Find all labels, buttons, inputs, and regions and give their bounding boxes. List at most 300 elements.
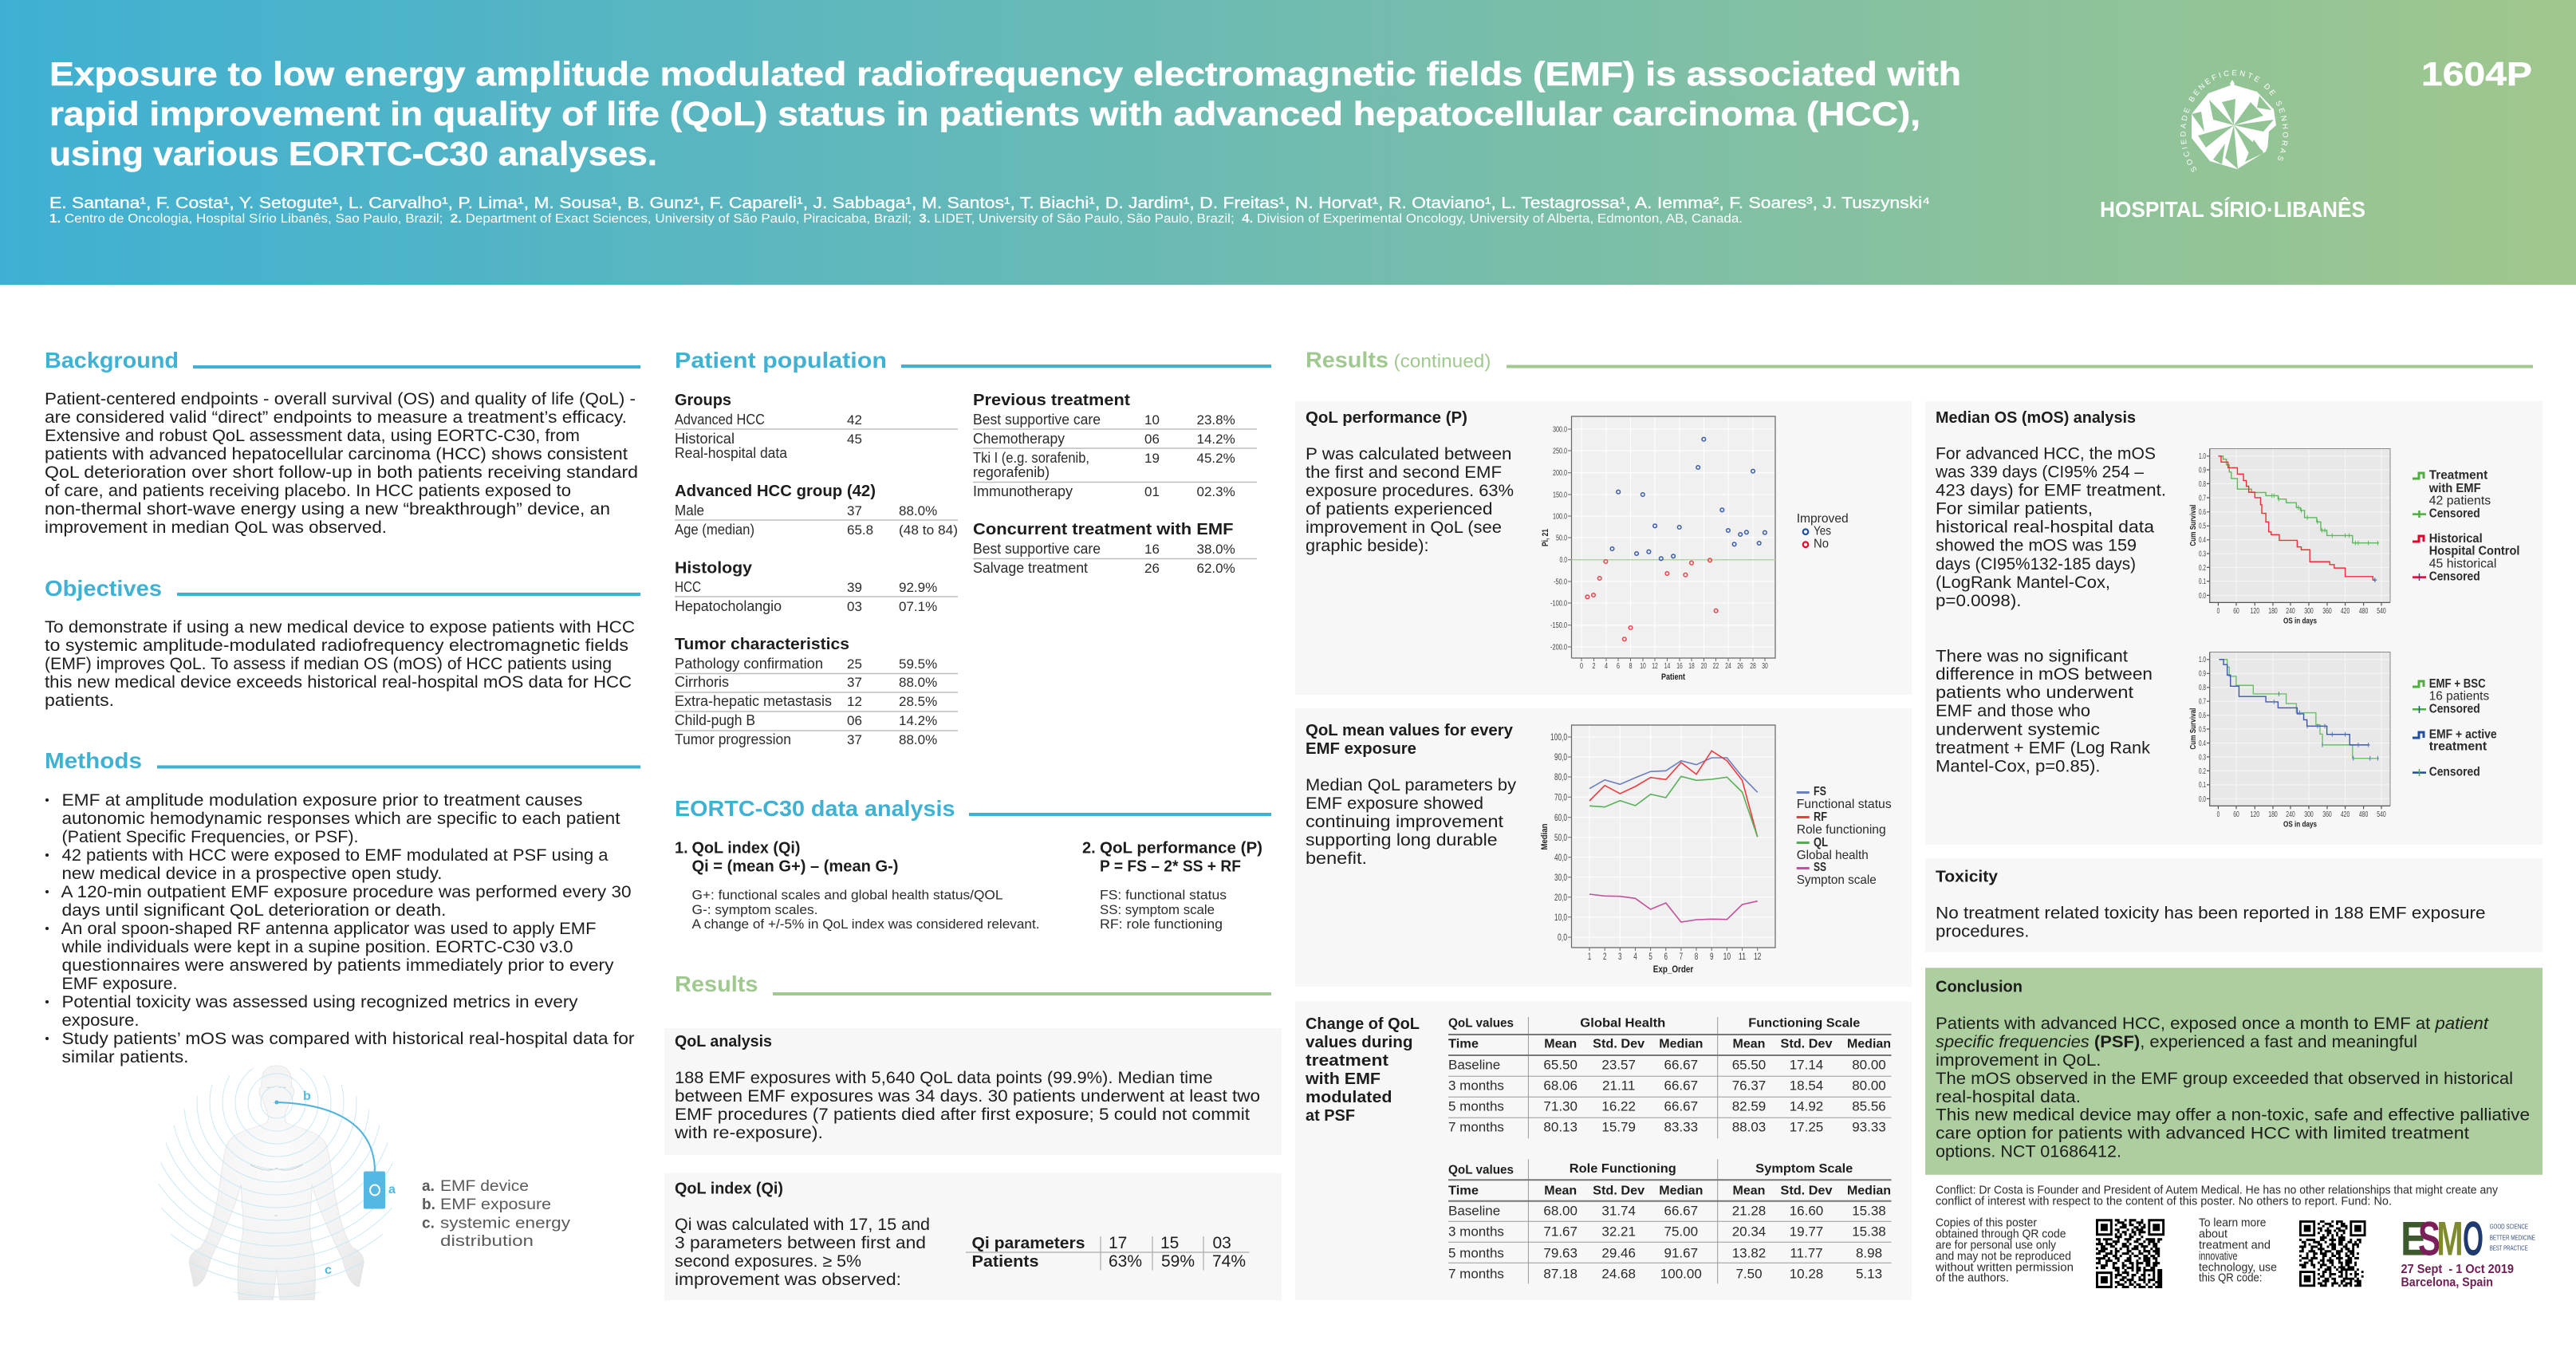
methods bullet list: new medical device in a prospective open study.: [62, 865, 442, 883]
background text: are considered valid “direct” endpoints to measure a treatment’s efficacy.: [45, 408, 627, 427]
not improved points: [1585, 558, 1718, 641]
table: tumor characteristics: 14.2%: [899, 713, 937, 728]
x axis labels: 24: [1725, 662, 1731, 671]
objectives text: patients.: [45, 692, 114, 710]
panel: background: [45, 348, 640, 537]
conclusion text: [1936, 1015, 2530, 1161]
table: tumor characteristics: 59.5%: [899, 656, 937, 672]
x axis labels: 5: [1648, 951, 1652, 962]
illustration legend: a.: [422, 1178, 435, 1195]
median OS text one: was 339 days (CI95% 254 –: [1935, 463, 2144, 482]
table: groups: 45: [847, 432, 862, 447]
table: tumor characteristics: 25: [847, 656, 862, 672]
toxicity text: [1936, 905, 2485, 941]
y axis labels: 0.2: [2199, 564, 2206, 573]
y axis labels: -100.0: [1550, 600, 1567, 608]
table: previous treatment: 02.3%: [1196, 484, 1235, 499]
table: previous treatment: 23.8%: [1196, 412, 1235, 428]
table: global health and functioning scale: Baseline: [1448, 1058, 1500, 1073]
heading: change of QoL values: with EMF: [1305, 1070, 1381, 1088]
improved points: [1610, 437, 1767, 561]
table: Qi parameters: Qi parameters: [971, 1235, 1085, 1252]
chart: survival EMF vs historical: [2189, 448, 2390, 625]
x axis labels: 480: [2359, 607, 2369, 616]
y axis labels: 50.0: [1556, 534, 1567, 542]
x axis labels: 6: [1664, 951, 1668, 962]
table: global health and functioning scale: 23.57: [1601, 1058, 1636, 1073]
QoL performance text: of patients experienced: [1306, 500, 1493, 518]
table: role functioning and symptom scale: 5.13: [1856, 1267, 1882, 1282]
line chart legend: RF: [1814, 810, 1827, 824]
QR code note: this QR code:: [2199, 1271, 2262, 1285]
illustration: body with EMF device: c: [325, 1263, 332, 1277]
title: rapid improvement in quality of life (QoL) status in patients with advanced hepatocellular carcinoma (HCC),: [49, 95, 1920, 132]
table: previous treatment: Chemotherapy: [973, 431, 1065, 447]
y axis labels: 0.6: [2199, 712, 2206, 720]
heading: toxicity: Toxicity: [1936, 869, 1999, 886]
objectives text: [45, 618, 635, 710]
table: role functioning and symptom scale: Baseline: [1448, 1204, 1500, 1219]
QR code one: [2096, 1219, 2164, 1288]
table: previous treatment: [973, 392, 1235, 499]
table: global health and functioning scale: Global Health: [1580, 1017, 1665, 1031]
y axis labels: 200.0: [1553, 469, 1567, 478]
table: tumor characteristics: 37: [847, 732, 862, 747]
heading: results continued: [1306, 348, 2533, 372]
x axis labels: 20: [1701, 662, 1707, 671]
table: global health and functioning scale: Time: [1448, 1038, 1479, 1051]
x axis labels: 3: [1618, 951, 1622, 962]
QoL analysis text: between EMF exposures was 34 days. 30 patients underwent at least two: [675, 1087, 1260, 1106]
QoL performance text: the first and second EMF: [1306, 463, 1502, 482]
table: histology: Histology: [675, 560, 753, 577]
median OS text two: [1936, 647, 2153, 775]
table: role functioning and symptom scale: Time: [1448, 1185, 1479, 1198]
formula: QoL performance: FS: functional status: [1100, 887, 1227, 903]
conclusion text: specific frequencies (PSF), experienced a fast and meaningful: [1936, 1033, 2417, 1051]
survival legend one: Censored: [2429, 570, 2480, 584]
y axis labels: 0.3: [2199, 550, 2206, 558]
x axis labels: 4: [1633, 951, 1637, 962]
survival legend one: Treatment: [2429, 469, 2488, 483]
objectives text: this new medical device exceeds historical real-hospital mOS data for HCC: [45, 673, 632, 692]
median OS text one: 423 days) for EMF treatment.: [1936, 482, 2166, 499]
background text: Extensive and robust QoL assessment data, using EORTC-C30, from: [45, 427, 580, 445]
table: global health and functioning scale: 65.50: [1732, 1058, 1766, 1073]
median OS text one: [1935, 445, 2166, 610]
conclusion text: improvement in QoL.: [1936, 1051, 2101, 1070]
table: groups: 42: [847, 412, 862, 428]
x axis labels: 300: [2304, 607, 2314, 616]
QoL mean text: benefit.: [1306, 849, 1367, 868]
x axis labels: 360: [2322, 810, 2332, 819]
table: role functioning and symptom scale: 68.00: [1543, 1204, 1578, 1219]
formula: QoL index: QoL index (Qi): [692, 839, 801, 857]
methods bullet list: EMF exposure.: [62, 975, 177, 993]
poster number: 1604P: [2421, 55, 2532, 93]
table: role functioning and symptom scale: Median: [1847, 1185, 1891, 1198]
survival legend two: EMF + active: [2429, 728, 2497, 742]
y axis labels: 150.0: [1553, 491, 1567, 499]
table: histology: 03: [847, 599, 862, 614]
x axis labels: [2217, 607, 2386, 616]
table: role functioning and symptom scale: 29.46: [1601, 1246, 1636, 1261]
logo: ESMO: S: [2418, 1212, 2440, 1265]
table: global health and functioning scale: Median: [1659, 1038, 1703, 1051]
table: tumor characteristics: 28.5%: [899, 694, 937, 709]
survival legend two: treatment: [2429, 740, 2487, 754]
table: concurrent treatment: Concurrent treatment with EMF: [973, 521, 1233, 538]
table: Qi parameters: 17: [1109, 1234, 1127, 1252]
illustration legend: [422, 1178, 571, 1250]
chart: median QoL lines: Exp_Order: [1653, 964, 1694, 975]
table: global health and functioning scale: Mean: [1733, 1038, 1765, 1051]
x axis labels: 10: [1640, 662, 1646, 671]
y axis labels: 80,0: [1554, 771, 1567, 782]
methods bullet list: 42 patients with HCC were exposed to EMF modulated at PSF using a: [62, 846, 609, 865]
panel: conclusion: [1925, 968, 2543, 1175]
QoL analysis text: with re-exposure).: [674, 1124, 823, 1142]
x axis labels: 18: [1688, 662, 1695, 671]
table: concurrent treatment: 62.0%: [1196, 561, 1235, 576]
x axis labels: 0: [1580, 662, 1583, 671]
table: global health and functioning scale: 88.03: [1732, 1120, 1766, 1135]
formula: QoL index: G+: functional scales and global health status/QOL: [692, 887, 1003, 903]
illustration legend: b.: [422, 1196, 435, 1213]
survival legend two: Censored: [2429, 766, 2480, 779]
QR code two: [2299, 1220, 2366, 1287]
x axis labels: 26: [1737, 662, 1743, 671]
table: concurrent treatment: 16: [1144, 542, 1160, 557]
QR copyright note: without written permission: [1935, 1260, 2074, 1274]
table: role functioning and symptom scale: Std. Dev: [1780, 1185, 1833, 1198]
QoL analysis text: [674, 1069, 1260, 1142]
formula: QoL index: G-: symptom scales.: [692, 902, 818, 917]
methods bullet list: similar patients.: [62, 1048, 188, 1066]
QoL mean text: continuing improvement: [1306, 813, 1503, 831]
table: role functioning and symptom scale: Median: [1659, 1185, 1703, 1198]
formula: QoL index: [675, 839, 1040, 932]
survival legend one: 42 patients: [2429, 495, 2491, 507]
QoL performance text: graphic beside):: [1306, 537, 1429, 555]
table: Qi parameters: 63%: [1109, 1252, 1142, 1271]
table: global health and functioning scale: 18.54: [1790, 1078, 1823, 1094]
congress date and place: [2401, 1263, 2514, 1290]
QoL mean text: Median QoL parameters by: [1306, 776, 1517, 794]
x axis labels: [2217, 810, 2386, 819]
median OS text two: treatment + EMF (Log Rank: [1936, 739, 2151, 757]
survival legend one: Hospital Control: [2429, 545, 2520, 558]
QR code note: technology, use: [2199, 1260, 2277, 1274]
logo: ESMO: [2401, 1212, 2535, 1290]
table: role functioning and symptom scale: Std. Dev: [1593, 1185, 1644, 1198]
table: advanced HCC group: 37: [847, 503, 862, 518]
table: concurrent treatment: 38.0%: [1196, 542, 1235, 557]
table: global health and functioning scale: Std. Dev: [1593, 1038, 1644, 1051]
y axis labels: 0.2: [2199, 767, 2206, 776]
QoL index text: 3 parameters between first and: [675, 1234, 926, 1252]
chart: scatter of P per patient: Patient: [1661, 672, 1685, 682]
table: previous treatment: Immunotherapy: [973, 483, 1073, 499]
logo: ESMO: E: [2401, 1212, 2427, 1265]
x axis labels: 30: [1762, 662, 1768, 671]
QR code note: To learn more: [2199, 1216, 2267, 1229]
median OS text one: historical real-hospital data: [1936, 518, 2154, 536]
background text: QoL deterioration over short follow-up in both patients receiving standard: [45, 463, 638, 482]
x axis labels: 120: [2251, 810, 2259, 819]
table: tumor characteristics: Child-pugh B: [675, 712, 755, 728]
table: role functioning and symptom scale: QoL values: [1448, 1163, 1514, 1177]
background text: Patient-centered endpoints - overall survival (OS) and quality of life (QoL) -: [45, 390, 636, 408]
y axis labels: 40,0: [1554, 852, 1567, 863]
QR copyright note: of the authors.: [1936, 1271, 2009, 1285]
chart: survival EMF vs historical: Cum Survival: [2189, 504, 2198, 546]
median OS text two: There was no significant: [1936, 647, 2128, 665]
table: role functioning and symptom scale: 75.00: [1664, 1224, 1698, 1240]
table: global health and functioning scale: 85.56: [1852, 1099, 1886, 1114]
x axis labels: 10: [1723, 951, 1731, 962]
chart: scatter of P per patient: [1541, 416, 1775, 682]
heading: QoL mean values: [1306, 722, 1514, 758]
y axis labels: 0.6: [2199, 508, 2206, 517]
table: global health and functioning scale: 66.67: [1664, 1078, 1698, 1094]
QoL analysis text: EMF procedures (7 patients died after first exposure; 5 could not commit: [675, 1106, 1250, 1124]
table: tumor characteristics: 37: [847, 675, 862, 690]
survival legend two: [2413, 677, 2497, 779]
table: global health and functioning scale: 14.92: [1790, 1099, 1823, 1114]
x axis labels: 180: [2268, 607, 2278, 616]
median OS text one: days (CI95%132-185 days): [1936, 555, 2136, 574]
title: using various EORTC-C30 analyses.: [49, 135, 657, 172]
chart: survival EMF vs historical: OS in days: [2283, 617, 2317, 625]
median OS text one: For similar patients,: [1936, 499, 2093, 518]
median OS text two: patients who underwent: [1936, 684, 2133, 702]
table: previous treatment: 45.2%: [1196, 451, 1235, 466]
panel: patient population: [675, 348, 1271, 747]
table: histology: 07.1%: [899, 599, 937, 614]
x axis labels: 2: [1592, 662, 1596, 671]
methods bullet list: A 120-min outpatient EMF exposure procedure was performed every 30: [61, 883, 632, 901]
y axis labels: [2199, 452, 2206, 601]
table: global health and functioning scale: 93.33: [1852, 1120, 1886, 1135]
body silhouette: [189, 1066, 364, 1300]
methods bullet list: EMF at amplitude modulation exposure prior to treatment causes: [62, 791, 582, 810]
table: role functioning and symptom scale: 3 months: [1448, 1224, 1504, 1240]
table: tumor characteristics: 06: [847, 713, 862, 728]
heading: QoL mean values: QoL mean values for every: [1306, 722, 1514, 739]
heading: change of QoL values: at PSF: [1306, 1107, 1355, 1125]
y axis labels: 0.4: [2199, 536, 2206, 545]
methods bullet list: exposure.: [62, 1011, 139, 1030]
table: Qi parameters: 74%: [1212, 1252, 1246, 1271]
x axis labels: 240: [2286, 810, 2295, 819]
formula: QoL performance: RF: role functioning: [1100, 916, 1223, 932]
chart: scatter of P per patient: Pi, 21: [1541, 529, 1550, 546]
panel: toxicity: [1925, 858, 2543, 952]
table: global health and functioning scale: 80.13: [1543, 1120, 1578, 1135]
survival legend two: EMF + BSC: [2429, 677, 2486, 691]
conclusion text: real-hospital data.: [1936, 1088, 2081, 1106]
line chart legend: Global health: [1797, 849, 1869, 862]
logo: ESMO: O: [2463, 1212, 2483, 1265]
authors: E. Santana¹, F. Costa¹, Y. Setogute¹, L. Carvalho¹, P. Lima¹, M. Sousa¹, B. Gunz¹, F. Capareli¹, J. Sabbaga¹, M. Santos¹, T. Biachi¹, D. Jardim¹, D. Freitas¹, N. Horvat¹, R. Otaviano¹, L. Testagrossa¹, A. Iemma², F. Soares³, J. Tuszynski⁴: [49, 195, 1930, 212]
heading: QoL analysis: QoL analysis: [675, 1033, 772, 1051]
heading: results continued: (continued): [1394, 351, 1491, 372]
table: tumor characteristics: 12: [847, 694, 862, 709]
y axis labels: 0.7: [2199, 697, 2206, 707]
table: global health and functioning scale: Std. Dev: [1780, 1038, 1833, 1051]
survival legend one: 45 historical: [2429, 557, 2496, 570]
table: global health and functioning scale: 17.14: [1790, 1058, 1823, 1073]
x axis labels: 540: [2377, 810, 2386, 819]
table: advanced HCC group: Age (median): [675, 522, 754, 538]
QoL mean text: supporting long durable: [1306, 831, 1498, 849]
table: global health and functioning scale: [1448, 1017, 1892, 1138]
QR copyright note: Copies of this poster: [1936, 1216, 2037, 1229]
scatter legend: Yes: [1814, 525, 1831, 538]
table: global health and functioning scale: 80.00: [1852, 1078, 1886, 1094]
chart: survival by concurrent treatment: [2189, 652, 2390, 830]
y axis labels: 0.5: [2199, 726, 2206, 734]
y axis labels: 0.1: [2199, 577, 2206, 586]
series FS: [1589, 758, 1758, 792]
y axis labels: 0.9: [2199, 466, 2206, 475]
heading: background: Background: [45, 348, 179, 373]
y axis labels: 0,0: [1558, 932, 1567, 943]
table: groups: [675, 392, 862, 461]
x axis labels: 0: [2217, 607, 2220, 616]
table: global health and functioning scale: 68.06: [1543, 1078, 1578, 1094]
toxicity text: No treatment related toxicity has been reported in 188 EMF exposure: [1936, 905, 2485, 923]
panel: methods: [45, 748, 640, 1300]
objectives text: to systemic amplitude-modulated radiofrequency electromagnetic fields: [45, 637, 628, 655]
QR copyright note: and may not be reproduced: [1936, 1249, 2071, 1263]
table: advanced HCC group: Advanced HCC group (42): [675, 483, 876, 500]
logo: ESMO: BETTER MEDICINE: [2490, 1233, 2535, 1241]
series QL: [1589, 776, 1758, 837]
background text: patients with advanced hepatocellular carcinoma (HCC) shows consistent: [45, 445, 628, 463]
x axis labels: 180: [2268, 810, 2278, 819]
table: role functioning and symptom scale: Mean: [1733, 1185, 1765, 1198]
line chart legend: Functional status: [1797, 798, 1892, 811]
formula: QoL performance: 2.: [1082, 839, 1096, 857]
table: global health and functioning scale: 17.25: [1790, 1120, 1823, 1135]
y axis labels: 0.9: [2199, 670, 2206, 678]
table: global health and functioning scale: 80.00: [1852, 1058, 1886, 1073]
median OS text one: (LogRank Mantel-Cox,: [1936, 574, 2110, 592]
table: tumor characteristics: Extra-hepatic metastasis: [675, 693, 832, 709]
panel: EORTC-C30 data analysis: [675, 796, 1271, 932]
QR code note: about: [2199, 1227, 2228, 1240]
curves: [2219, 660, 2379, 761]
heading: median OS: Median OS (mOS) analysis: [1936, 409, 2136, 427]
methods bullet list: Study patients’ mOS was compared with historical real-hospital data for: [62, 1030, 635, 1048]
x axis labels: 12: [1754, 951, 1762, 962]
table: global health and functioning scale: Median: [1847, 1038, 1891, 1051]
x axis labels: 6: [1617, 662, 1620, 671]
median OS text one: p=0.0098).: [1936, 592, 2021, 610]
table: concurrent treatment: 26: [1144, 561, 1160, 576]
methods bullet list: Potential toxicity was assessed using recognized metrics in every: [62, 993, 578, 1011]
formula: QoL performance: [1082, 839, 1262, 932]
background text: improvement in median QoL was observed.: [45, 518, 387, 537]
table: previous treatment: 14.2%: [1196, 432, 1235, 447]
panel: QoL index: [664, 1173, 1282, 1300]
heading: change of QoL values: modulated: [1306, 1089, 1392, 1106]
y axis labels: 0.0: [2199, 795, 2206, 804]
chart: median QoL lines: [1540, 725, 1775, 975]
table: role functioning and symptom scale: [1448, 1159, 1892, 1283]
x axis labels: 420: [2341, 607, 2350, 616]
y axis labels: -150.0: [1550, 621, 1567, 630]
table: role functioning and symptom scale: 91.67: [1664, 1246, 1698, 1261]
table: concurrent treatment: [973, 521, 1235, 576]
formula: QoL performance: P = FS – 2* SS + RF: [1100, 858, 1241, 876]
y axis labels: 0.3: [2199, 753, 2206, 763]
table: global health and functioning scale: Functioning Scale: [1748, 1017, 1860, 1031]
scatter legend: [1797, 512, 1849, 551]
conflict statement: conflict of interest with respect to the content of this poster. No others to report. Fund: No.: [1936, 1195, 2392, 1208]
line chart legend: Sympton scale: [1797, 873, 1877, 887]
table: tumor characteristics: Tumor progression: [675, 731, 791, 747]
QoL mean text: EMF exposure showed: [1306, 794, 1483, 813]
table: role functioning and symptom scale: 20.34: [1732, 1224, 1766, 1240]
y axis labels: 0.7: [2199, 495, 2206, 503]
conclusion text: care option for patients with advanced HCC with limited treatment: [1936, 1125, 2469, 1143]
y axis labels: -50.0: [1554, 577, 1567, 587]
table: tumor characteristics: Cirrhoris: [675, 674, 729, 690]
congress date and place: 27 Sept - 1 Oct 2019: [2401, 1263, 2514, 1276]
panel: QoL performance: [1295, 401, 1912, 695]
survival legend one: [2413, 469, 2520, 584]
table: global health and functioning scale: 76.37: [1732, 1078, 1766, 1094]
objectives text: (EMF) improves QoL. To assess if median OS (mOS) of HCC patients using: [45, 655, 612, 673]
table: role functioning and symptom scale: 16.60: [1790, 1204, 1823, 1219]
title: [49, 55, 1961, 172]
y axis labels: -200.0: [1550, 643, 1567, 652]
objectives text: To demonstrate if using a new medical device to expose patients with HCC: [45, 618, 635, 637]
y axis labels: 1.0: [2199, 452, 2206, 461]
QR code note: [2199, 1216, 2277, 1285]
table: previous treatment: Best supportive care: [973, 412, 1101, 428]
y axis labels: 100,0: [1550, 731, 1567, 743]
table: role functioning and symptom scale: Role Functioning: [1570, 1162, 1676, 1176]
congress date and place: Barcelona, Spain: [2401, 1276, 2493, 1290]
x axis labels: 28: [1750, 662, 1756, 671]
table: role functioning and symptom scale: 66.67: [1664, 1204, 1698, 1219]
illustration legend: EMF device: [440, 1178, 529, 1195]
background text: of care, and patients receiving placebo. In HCC patients exposed to: [45, 482, 571, 500]
table: role functioning and symptom scale: 24.68: [1601, 1267, 1636, 1282]
table: groups: Groups: [675, 392, 731, 409]
QR code note: treatment and: [2199, 1238, 2271, 1252]
y axis labels: [2199, 656, 2206, 804]
background text: non-thermal short-wave energy using a new “breakthrough” device, an: [45, 500, 610, 518]
table: role functioning and symptom scale: 7.50: [1735, 1267, 1763, 1282]
formula: QoL performance: SS: symptom scale: [1100, 902, 1215, 917]
conflict statement: Conflict: Dr Costa is Founder and President of Autem Medical. He has no other relationships that might create any: [1936, 1184, 2498, 1197]
x axis labels: 1: [1588, 951, 1591, 962]
affiliations: 1. Centro de Oncologia, Hospital Sírio Libanês, Sao Paulo, Brazil; 2. Department of Exact Sciences, University of São Paulo, Piracicaba, Brazil; 3. LIDET, University of São Paulo, São Paulo, Brazil; 4. Division of Experimental Oncology, University of Alberta, Edmonton, AB, Canada.: [49, 212, 1743, 226]
x axis labels: 420: [2341, 810, 2350, 819]
methods bullet list: days until significant QoL deterioration or death.: [62, 901, 447, 920]
EMF cable: [277, 1102, 375, 1172]
QoL index text: [675, 1216, 930, 1289]
table: advanced HCC group: Male: [675, 503, 704, 518]
table: tumor characteristics: [675, 636, 937, 747]
x axis labels: 14: [1664, 662, 1671, 671]
methods bullet list: An oral spoon-shaped RF antenna applicator was used to apply EMF: [61, 920, 597, 938]
